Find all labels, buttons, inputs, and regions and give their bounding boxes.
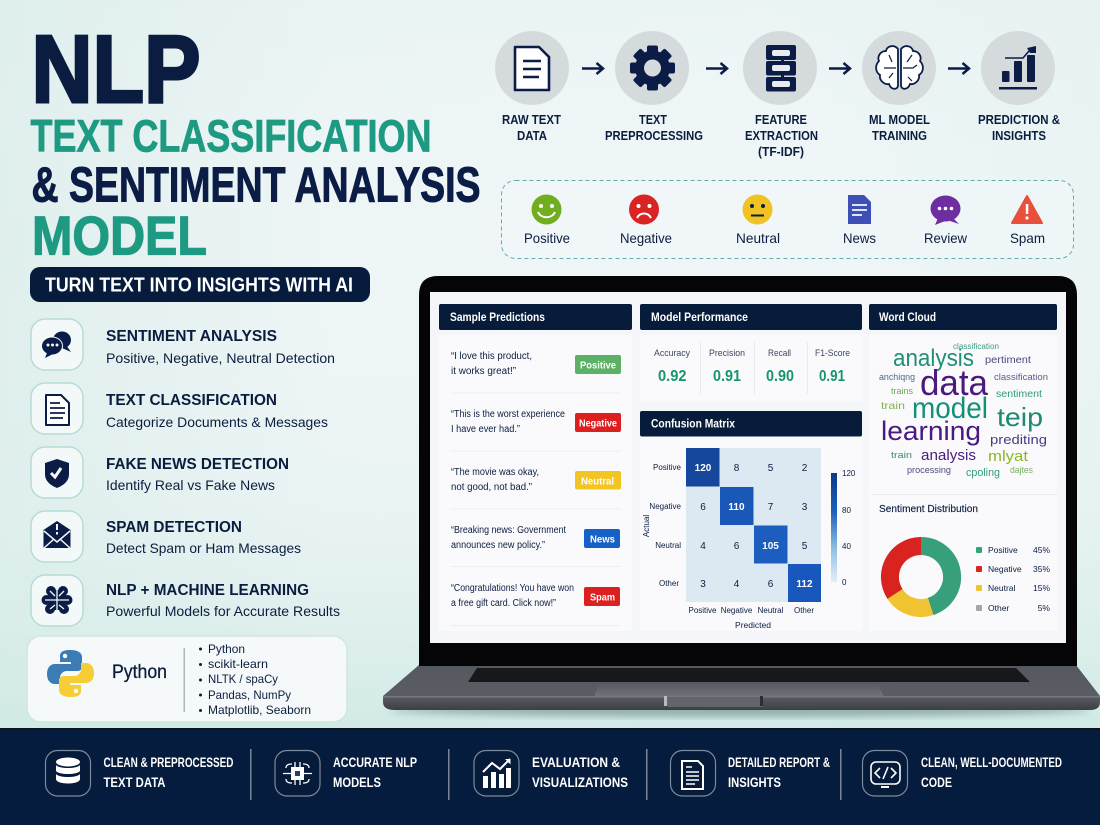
word cloud words: teip — [997, 402, 1043, 432]
metric: recall — [766, 348, 794, 385]
donut legend: 45% — [1033, 545, 1050, 555]
tagline pill — [30, 267, 370, 302]
column labels: Other — [794, 606, 814, 615]
word cloud words: processing — [907, 465, 951, 476]
matrix heatmap: 5 — [802, 541, 808, 552]
panel heading — [439, 304, 632, 330]
word cloud words: mlyat — [988, 448, 1029, 465]
prediction row: positive: “I love this product, — [451, 351, 532, 362]
step: feature extraction: FEATURE — [755, 113, 807, 127]
matrix heatmap: 4 — [700, 541, 706, 552]
donut legend: Positive — [988, 545, 1018, 555]
tech list: Pandas, NumPy — [208, 688, 291, 702]
footer item: evaluation: VISUALIZATIONS — [532, 775, 628, 790]
footer item: clean code — [862, 750, 1062, 796]
prediction row: positive: it works great!” — [451, 366, 516, 377]
word cloud words: prediting — [990, 433, 1047, 447]
step: prediction and insights: INSIGHTS — [992, 129, 1046, 143]
feature: sentiment analysis — [31, 319, 335, 370]
word cloud words — [879, 342, 1048, 479]
colorbar: 80 — [842, 506, 851, 515]
colorbar: 120 — [842, 469, 856, 478]
donut legend: Neutral — [988, 583, 1016, 593]
matrix heatmap: 4 — [734, 579, 740, 590]
pipeline flow — [495, 31, 1060, 159]
category: neutral: Neutral — [736, 230, 780, 246]
matrix heatmap: 3 — [700, 579, 706, 590]
footer item: clean data: CLEAN & PREPROCESSED — [104, 755, 234, 770]
metric: accuracy — [654, 348, 690, 385]
colorbar: 0 — [842, 578, 847, 587]
donut legend: 5% — [1038, 603, 1050, 613]
category: neutral — [736, 194, 780, 246]
metric: f1-score: 0.91 — [819, 368, 845, 385]
title: NLP — [32, 16, 200, 123]
category: negative: Negative — [620, 230, 672, 246]
footer item: detailed report — [670, 750, 830, 796]
prediction row: negative: Negative — [579, 418, 617, 430]
laptop bezel — [419, 276, 1077, 666]
laptop base — [383, 665, 1100, 710]
prediction row: news: announces new policy.” — [451, 540, 545, 551]
step: prediction and insights — [978, 31, 1060, 143]
word cloud words: train — [891, 450, 912, 460]
category: negative — [620, 194, 672, 246]
prediction row: positive: Positive — [580, 360, 616, 372]
panel heading: Model Performance — [651, 310, 748, 324]
matrix heatmap: 112 — [796, 579, 813, 590]
footer item: detailed report: DETAILED REPORT & — [728, 755, 830, 770]
word cloud words: pertiment — [985, 354, 1031, 366]
tech list: Python — [208, 642, 245, 656]
donut legend: Negative — [988, 564, 1022, 574]
footer item: clean data — [46, 750, 234, 796]
column labels: Positive — [688, 606, 717, 615]
footer item: clean code: CODE — [921, 775, 952, 790]
feature: sentiment analysis: Positive, Negative, Neutral Detection — [106, 350, 335, 366]
footer band — [0, 728, 1100, 825]
arrow — [706, 63, 727, 74]
row labels: Other — [659, 579, 679, 588]
word cloud words: classification — [953, 342, 999, 351]
panel heading — [640, 304, 862, 330]
matrix heatmap — [686, 448, 821, 602]
word cloud words: anchiqng — [879, 372, 915, 383]
feature: nlp and machine learning: Powerful Models for Accurate Results — [106, 603, 340, 619]
feature: text classification: TEXT CLASSIFICATION — [106, 392, 277, 409]
colorbar — [831, 469, 856, 587]
axis label: actual: Actual — [642, 515, 651, 537]
word cloud words: learning — [881, 416, 981, 446]
row labels: Positive — [653, 463, 682, 472]
matrix heatmap: 6 — [768, 579, 774, 590]
sentiment distribution heading: Sentiment Distribution — [879, 503, 978, 515]
step: prediction and insights: PREDICTION & — [978, 113, 1060, 127]
matrix heatmap: 3 — [802, 502, 808, 513]
donut legend: Other — [988, 603, 1009, 613]
word cloud words: sentiment — [996, 388, 1042, 400]
matrix heatmap: 2 — [802, 463, 808, 474]
prediction row: negative: I have ever had.” — [451, 424, 520, 435]
category: positive: Positive — [524, 230, 570, 246]
metric: accuracy: 0.92 — [658, 368, 687, 385]
step: text preprocessing: TEXT — [639, 113, 667, 127]
feature: spam detection: Detect Spam or Ham Messages — [106, 540, 301, 556]
panel heading — [869, 304, 1057, 330]
word cloud words: data — [920, 362, 989, 403]
feature: fake news detection — [31, 447, 289, 498]
matrix heatmap: 120 — [695, 463, 712, 474]
prediction row: spam: “Congratulations! You have won — [451, 583, 574, 594]
colorbar: 40 — [842, 542, 851, 551]
panel heading: Confusion Matrix — [651, 416, 735, 430]
step: raw text data — [495, 31, 569, 143]
panel heading: Sample Predictions — [450, 310, 545, 324]
title — [30, 16, 480, 266]
prediction row: neutral: Neutral — [581, 476, 614, 488]
prediction row: negative: “This is the worst experience — [451, 409, 565, 420]
laptop shadow — [390, 703, 1090, 717]
word cloud words: analysis — [921, 447, 976, 464]
category: spam: Spam — [1010, 230, 1045, 246]
arrow — [582, 63, 603, 74]
feature: spam detection: SPAM DETECTION — [106, 519, 242, 536]
prediction row: positive — [451, 351, 621, 377]
categories legend box — [502, 180, 1074, 258]
title: TEXT CLASSIFICATION — [30, 110, 432, 162]
prediction row: news — [451, 525, 620, 551]
metric: f1-score — [815, 348, 850, 385]
feature: fake news detection: Identify Real vs Fake News — [106, 477, 275, 493]
tech list: NLTK / spaCy — [208, 672, 278, 686]
prediction row: spam — [451, 583, 620, 609]
metric: precision: 0.91 — [713, 368, 741, 385]
step: feature extraction: EXTRACTION — [745, 129, 818, 143]
word cloud words: trains — [891, 386, 913, 396]
step: raw text data: DATA — [517, 129, 547, 143]
word cloud words: classification — [994, 372, 1048, 383]
axis label: predicted: Predicted — [735, 620, 771, 630]
panel: model performance — [640, 304, 862, 402]
laptop — [383, 276, 1100, 717]
word cloud words: dajtes — [1010, 465, 1033, 475]
footer item: detailed report: INSIGHTS — [728, 775, 781, 790]
python card: Python — [112, 662, 167, 683]
donut chart — [890, 546, 952, 608]
step: ml model training — [862, 31, 936, 143]
panel heading: Word Cloud — [879, 310, 936, 324]
prediction row: negative — [451, 409, 621, 435]
feature: fake news detection: FAKE NEWS DETECTION — [106, 456, 289, 473]
arrow — [829, 63, 850, 74]
footer item: accurate models: ACCURATE NLP — [333, 755, 417, 770]
word cloud words: analysis — [893, 345, 974, 372]
category: review — [924, 196, 968, 246]
prediction row: neutral: not good, not bad.” — [451, 482, 532, 493]
feature: text classification — [31, 383, 328, 434]
panel: sample predictions — [439, 304, 632, 631]
matrix heatmap: 110 — [728, 502, 745, 513]
tech list — [199, 642, 311, 717]
prediction row: news: “Breaking news: Government — [451, 525, 566, 536]
matrix heatmap: 105 — [762, 541, 779, 552]
footer item: evaluation: EVALUATION & — [532, 755, 620, 770]
word cloud words: train — [881, 401, 905, 412]
step: text preprocessing: PREPROCESSING — [605, 129, 703, 143]
column labels — [688, 606, 814, 615]
footer item: accurate models — [275, 750, 417, 796]
feature list — [31, 319, 340, 626]
metric: precision — [709, 348, 745, 385]
panel: word cloud — [869, 304, 1057, 631]
laptop screen — [430, 292, 1066, 643]
donut legend: 15% — [1033, 583, 1050, 593]
column labels: Neutral — [758, 606, 784, 615]
tech list: Matplotlib, Seaborn — [208, 703, 311, 717]
donut legend: 35% — [1033, 564, 1050, 574]
step: ml model training: TRAINING — [872, 129, 927, 143]
column labels: Negative — [721, 606, 753, 615]
prediction row: neutral: “The movie was okay, — [451, 467, 539, 478]
title: MODEL — [32, 204, 207, 266]
arrow — [948, 63, 969, 74]
title: & SENTIMENT ANALYSIS — [32, 158, 480, 212]
feature: nlp and machine learning: NLP + MACHINE LEARNING — [106, 582, 309, 599]
matrix heatmap: 5 — [768, 463, 774, 474]
prediction row: neutral — [451, 467, 621, 493]
matrix heatmap: 7 — [768, 502, 774, 513]
step: ml model training: ML MODEL — [869, 113, 930, 127]
matrix heatmap: 8 — [734, 463, 740, 474]
footer item: clean data: TEXT DATA — [104, 775, 166, 790]
matrix heatmap: 6 — [734, 541, 740, 552]
matrix heatmap: 6 — [700, 502, 706, 513]
row labels — [649, 463, 682, 588]
category: positive — [524, 194, 570, 246]
row labels: Neutral — [655, 541, 681, 550]
feature: text classification: Categorize Documents & Messages — [106, 414, 328, 430]
feature: sentiment analysis: SENTIMENT ANALYSIS — [106, 328, 277, 345]
panel heading — [640, 411, 862, 436]
prediction row: news: News — [590, 534, 615, 546]
metric: recall: Recall — [768, 348, 791, 359]
category: spam — [1010, 196, 1045, 246]
footer item: evaluation — [474, 750, 628, 796]
step: feature extraction: (TF-IDF) — [758, 145, 804, 159]
word cloud words: cpoling — [966, 467, 1000, 479]
metric: recall: 0.90 — [766, 368, 794, 385]
step: feature extraction — [743, 31, 818, 159]
tech list: scikit-learn — [208, 657, 268, 671]
prediction row: spam: a free gift card. Click now!” — [451, 598, 556, 609]
tagline pill: TURN TEXT INTO INSIGHTS WITH AI — [45, 274, 353, 296]
feature: nlp and machine learning — [31, 575, 340, 626]
row labels: Negative — [649, 502, 682, 511]
metric: f1-score: F1-Score — [815, 348, 850, 359]
feature: spam detection — [31, 511, 301, 562]
icon: python logo — [47, 650, 94, 697]
prediction row: spam: Spam — [590, 592, 615, 604]
metric: precision: Precision — [709, 348, 745, 359]
word cloud words: model — [912, 392, 988, 425]
python card — [27, 636, 347, 722]
donut legend — [976, 545, 1050, 613]
footer item: accurate models: MODELS — [333, 775, 381, 790]
step: raw text data: RAW TEXT — [502, 113, 561, 127]
step: text preprocessing — [605, 31, 703, 143]
metric: accuracy: Accuracy — [654, 348, 690, 359]
panel: confusion matrix — [640, 411, 862, 631]
category: news: News — [843, 230, 876, 246]
category: review: Review — [924, 230, 968, 246]
category: news — [843, 195, 876, 246]
